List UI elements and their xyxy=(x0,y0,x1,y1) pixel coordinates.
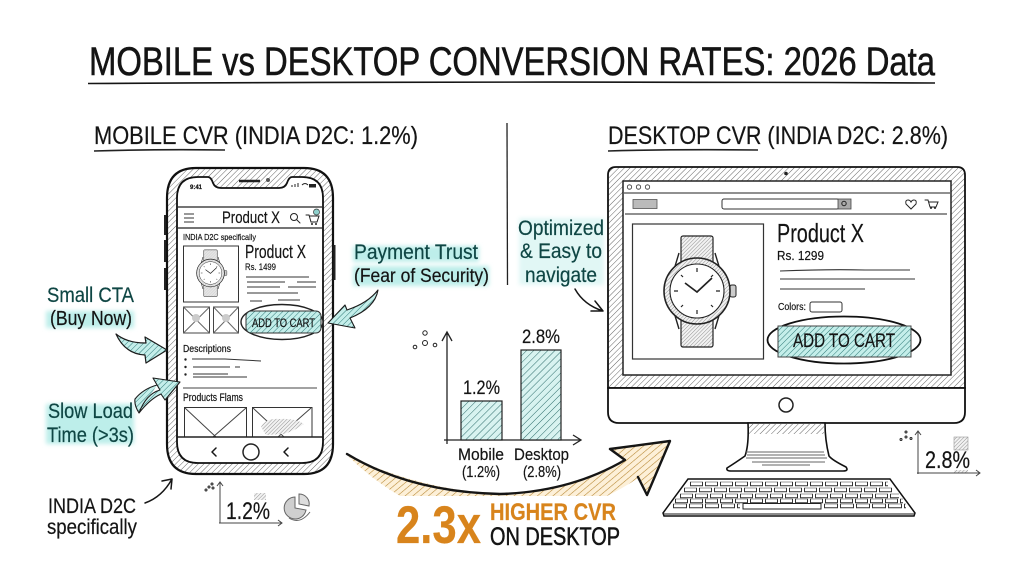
desktop add to cart button: ADD TO CART xyxy=(793,331,895,352)
axis label: mobile: (1.2%) xyxy=(462,464,500,481)
phone nav bar: Product X xyxy=(222,209,280,227)
heading: mobile CVR: MOBILE CVR (INDIA D2C: 1.2%) xyxy=(94,122,418,150)
callout: optimized: navigate xyxy=(525,264,597,287)
headline stat: 2.3x higher CVR: 2.3x xyxy=(396,496,481,555)
monitor screen xyxy=(623,181,951,375)
phone bottom nav xyxy=(178,437,322,460)
headline stat: 2.3x higher CVR: ON DESKTOP xyxy=(490,523,620,551)
callout: small CTA: (Buy Now) xyxy=(50,308,132,330)
monitor stand xyxy=(727,423,847,471)
callout: optimized xyxy=(518,217,604,287)
mini chart: mobile 1.2% xyxy=(205,482,282,526)
phone descriptions xyxy=(183,343,317,388)
callout: optimized: & Easy to xyxy=(520,240,602,263)
phone body xyxy=(167,168,333,474)
callout: slow load xyxy=(46,400,134,447)
phone add to cart button: ADD TO CART xyxy=(252,316,316,330)
bar: desktop xyxy=(521,326,561,440)
monitor bezel xyxy=(608,167,965,388)
phone product text: Rs. 1499 xyxy=(245,262,276,273)
callout: India D2C xyxy=(47,495,137,539)
keyboard xyxy=(663,479,915,516)
axis label: desktop: (2.8%) xyxy=(523,464,561,481)
browser toolbar xyxy=(624,185,950,214)
desktop monitor xyxy=(608,167,965,516)
status bar: 9:41 xyxy=(190,185,203,191)
phone product text: Product X xyxy=(245,242,306,262)
desktop product text: Rs. 1299 xyxy=(777,248,824,263)
headline stat: 2.3x higher CVR xyxy=(396,496,620,555)
arrow: payment trust xyxy=(328,290,378,328)
desktop product text: Product X xyxy=(777,218,864,248)
desktop add to cart button xyxy=(768,316,920,364)
monitor chin xyxy=(608,388,965,423)
big arrow: mobile to desktop xyxy=(347,441,670,496)
phone nav bar xyxy=(178,207,322,228)
status bar xyxy=(190,183,316,191)
phone mockup: INDIA D2C specifically xyxy=(183,232,257,242)
callout: slow load: Slow Load xyxy=(48,400,133,423)
bar: desktop: 2.8% xyxy=(522,326,560,348)
arrow: optimized xyxy=(575,289,603,311)
phone products section: Products Flams xyxy=(183,392,243,404)
axis label: desktop xyxy=(514,445,569,481)
axis label: mobile: Mobile xyxy=(458,445,504,464)
phone product text xyxy=(245,242,316,301)
mini chart: desktop 2.8% xyxy=(900,431,980,476)
arrow: India D2C xyxy=(145,479,172,503)
callout: India D2C: INDIA D2C xyxy=(48,495,136,518)
callout: optimized: Optimized xyxy=(518,217,604,240)
bar: mobile: 1.2% xyxy=(463,377,500,399)
mini chart: desktop 2.8%: 2.8% xyxy=(925,447,970,474)
callout: payment trust xyxy=(353,241,489,287)
phone descriptions: Descriptions xyxy=(183,343,231,355)
arrow: small CTA xyxy=(116,334,167,363)
chart axes xyxy=(442,332,581,445)
heading: desktop CVR: DESKTOP CVR (INDIA D2C: 2.8%) xyxy=(608,122,948,150)
phone screen xyxy=(177,177,323,463)
phone products section xyxy=(183,392,312,437)
phone mockup xyxy=(165,168,334,474)
bar: mobile xyxy=(461,377,502,440)
callout: small CTA: Small CTA xyxy=(47,284,134,307)
mini chart: mobile 1.2%: 1.2% xyxy=(226,498,270,525)
callout: slow load: Time (>3s) xyxy=(47,424,134,447)
chart decorative dots xyxy=(413,331,437,349)
headline stat: 2.3x higher CVR: HIGHER CVR xyxy=(490,499,616,526)
bar chart: mobile vs desktop xyxy=(413,326,581,481)
callout: payment trust: (Fear of Security) xyxy=(354,266,489,287)
callout: small CTA xyxy=(46,284,134,330)
callout: India D2C: specifically xyxy=(47,516,137,539)
desktop product text xyxy=(777,218,915,313)
axis label: mobile xyxy=(458,445,504,481)
callout: payment trust: Payment Trust xyxy=(354,241,478,264)
desktop watch image xyxy=(632,224,764,359)
phone thumbnails xyxy=(184,307,238,333)
axis label: desktop: Desktop xyxy=(514,445,569,464)
icon: pie chart xyxy=(284,494,310,520)
desktop product text: Colors: xyxy=(778,301,806,313)
phone watch image xyxy=(184,246,238,302)
arrow: slow load xyxy=(135,378,180,413)
phone add to cart button xyxy=(241,304,323,340)
